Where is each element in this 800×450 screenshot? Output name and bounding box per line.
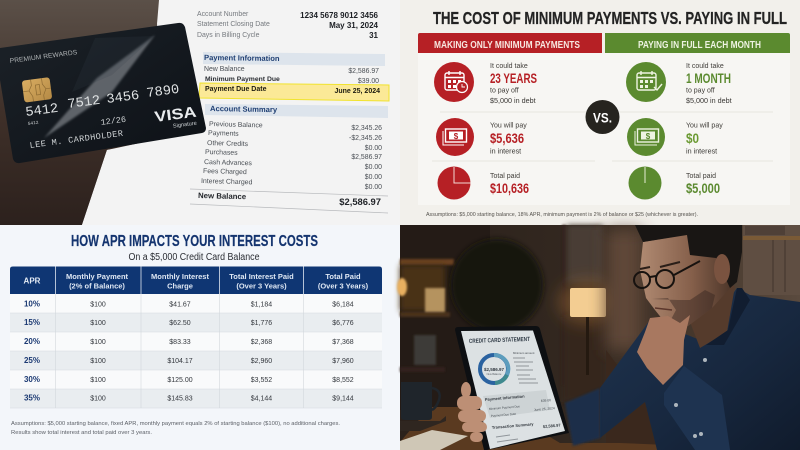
table title: HOW APR IMPACTS YOUR INTEREST COSTS (71, 233, 318, 250)
highlighted payment due date: June 25, 2024 (334, 88, 380, 95)
account summary section: $0.00 (365, 145, 382, 152)
tablet heading: CREDIT CARD STATEMENT (469, 337, 530, 345)
data table (10, 266, 382, 408)
row 30 percent: $3,552 (251, 377, 272, 384)
text: 23 years: $5,000 in debt (490, 96, 536, 105)
row 10 percent (24, 300, 354, 308)
row dividers (432, 112, 773, 161)
row 20 percent: $2,368 (251, 339, 272, 346)
man's far forearm sleeve (565, 388, 600, 446)
icon: red cash (436, 118, 474, 156)
text: total 10636 (490, 173, 529, 196)
text: 23 years: 23 YEARS (490, 70, 537, 86)
text: 1 month: It could take (686, 63, 724, 70)
text: interest 0: $0 (686, 130, 699, 146)
statement paper (82, 0, 400, 225)
row 30 percent: $100 (90, 377, 106, 384)
row 30 percent: $125.00 (167, 377, 193, 384)
text: interest 5636: in interest (490, 146, 521, 156)
panel: cost of minimum payments comparison (400, 0, 800, 225)
row 15 percent: 15% (24, 318, 40, 327)
table assumptions footnote: Assumptions: $5,000 starting balance, fixed APR, monthly payment equals 2% of starting balance ($100), no additional charges. (11, 421, 340, 427)
icon: green calendar (626, 62, 666, 102)
eyebrows (640, 262, 680, 269)
vs badge (586, 100, 620, 134)
account summary section: Previous Balance (209, 121, 263, 129)
account summary section (201, 104, 388, 191)
text: total 10636: Total paid (490, 173, 520, 180)
text: 1 month: $5,000 in debt (686, 96, 732, 105)
row 25 percent: $2,960 (251, 358, 272, 365)
panel: man reviewing tablet statement photo (397, 225, 800, 450)
row 15 percent: $6,776 (332, 320, 354, 327)
red column header (418, 33, 602, 53)
row 30 percent: 30% (24, 375, 40, 384)
text: 1 month: to pay off (686, 88, 715, 94)
account summary section: $0.00 (365, 184, 382, 191)
account summary section: $2,345.26 (351, 125, 382, 132)
panel: APR interest cost table (0, 225, 400, 450)
icon: green full circle total (628, 166, 662, 200)
payment information section: Minimum Payment Due (205, 76, 280, 83)
table body (10, 294, 382, 408)
card brand label: PREMIUM REWARDS (9, 49, 78, 65)
tablet payment information: Minimum Payment Due (489, 404, 520, 411)
text: 23 years: to pay off (490, 88, 519, 94)
card holder details: 5412 (27, 120, 39, 127)
ear (714, 254, 730, 284)
text: interest 5636 (490, 122, 527, 156)
row 10 percent: $6,184 (332, 302, 354, 308)
card number: 5412 (25, 102, 59, 121)
man's hand (637, 315, 690, 385)
account summary section: Interest Charged (201, 178, 253, 186)
row 20 percent: $7,368 (332, 339, 354, 346)
row 35 percent (24, 394, 354, 402)
table header: (Over 3 Years) (236, 282, 287, 290)
row 30 percent: $8,552 (332, 377, 354, 384)
table assumptions footnote (11, 421, 340, 436)
row 30 percent (24, 375, 354, 384)
man's head (634, 225, 742, 326)
table header: (2% of Balance) (69, 282, 125, 290)
icon: red pie total (438, 166, 470, 200)
icon: green cash: $ (646, 132, 651, 141)
account summary section: $2,586.97 (351, 154, 382, 161)
row 35 percent: $145.83 (167, 396, 193, 402)
table header: Charge (167, 282, 193, 290)
row 35 percent: $9,144 (332, 396, 354, 402)
account summary section: Payments (208, 130, 239, 138)
table header: (Over 3 Years) (318, 282, 369, 290)
statement header details: Statement Closing Date (197, 21, 270, 28)
red column header: MAKING ONLY MINIMUM PAYMENTS (434, 39, 580, 51)
text: total 5000: Total paid (686, 173, 716, 180)
shirt collar (706, 288, 750, 345)
text: interest 0: in interest (686, 146, 717, 156)
row 10 percent: $100 (90, 302, 106, 308)
visa logo: Signature (173, 121, 197, 130)
cuff buttons (674, 358, 707, 438)
man's shirt (600, 288, 800, 450)
account summary section: $0.00 (365, 174, 382, 181)
table header: Total Paid (325, 272, 361, 281)
row 25 percent: $104.17 (167, 358, 193, 365)
card holder details: 12/26 (100, 115, 127, 128)
row 25 percent: 25% (24, 356, 40, 365)
row 20 percent (24, 337, 354, 346)
man's near sleeve (664, 366, 730, 450)
row 10 percent: $41.67 (169, 302, 191, 308)
row 25 percent (24, 356, 354, 365)
row 20 percent: 20% (24, 337, 40, 346)
icon: green cash (627, 118, 665, 156)
card number (25, 83, 180, 121)
card holder details: LEE M. CARDHOLDER (29, 129, 124, 151)
new balance total: New Balance (198, 191, 247, 201)
text: 23 years (490, 63, 537, 105)
icon: red cash: $ (454, 132, 459, 141)
credit card (0, 23, 206, 163)
fingers holding tablet (457, 382, 487, 442)
table header: Monthly Payment (66, 272, 129, 281)
tablet (455, 326, 569, 450)
green column header: PAYING IN FULL EACH MONTH (638, 39, 761, 51)
visa logo: VISA (154, 104, 198, 126)
row 35 percent: $4,144 (251, 396, 272, 402)
comparison assumptions footnote: Assumptions: $5,000 starting balance, 18% APR, minimum payment is 2% of balance or $25 (whichever is greater). (426, 212, 698, 218)
row 25 percent: $7,960 (332, 358, 354, 365)
visa logo (154, 104, 198, 132)
tablet transaction summary (492, 421, 562, 442)
beard and mouth (652, 290, 715, 326)
row 35 percent: 35% (24, 394, 40, 402)
tablet list lines: Minimum amount (513, 351, 535, 355)
text: 1 month: 1 MONTH (686, 70, 731, 86)
row 15 percent: $100 (90, 320, 106, 327)
account summary section: Account Summary (210, 104, 278, 114)
green column header (605, 33, 790, 53)
card number: 3456 (106, 89, 140, 108)
glasses (634, 261, 700, 288)
card number: 7512 (67, 94, 101, 113)
desk (400, 407, 668, 450)
neck (690, 280, 735, 348)
statement header details: 1234 5678 9012 3456 (300, 11, 379, 20)
table header: Monthly Interest (151, 272, 209, 281)
lower background behind arm (606, 350, 660, 445)
content background (418, 53, 790, 205)
notebook (400, 430, 468, 450)
tablet payment information: $39.00 (541, 398, 551, 403)
card holder details (27, 115, 127, 151)
statement header details: May 31, 2024 (329, 21, 379, 30)
tablet payment information: June 25, 2024 (534, 406, 555, 412)
text: interest 5636: $5,636 (490, 130, 524, 146)
row 35 percent: $100 (90, 396, 106, 402)
text: interest 0 (686, 122, 723, 156)
tablet donut chart (480, 355, 508, 383)
row 20 percent: $83.33 (169, 339, 191, 346)
row 15 percent: $62.50 (169, 320, 191, 327)
payment information section (203, 52, 385, 85)
table header: APR (24, 276, 41, 286)
table subtitle: On a $5,000 Credit Card Balance (128, 252, 260, 263)
background shelves and lamp (397, 225, 800, 410)
panel: credit card and statement photo (0, 0, 400, 225)
wood table background (0, 0, 205, 225)
payment information section: Payment Information (204, 53, 280, 63)
tablet payment information: Payment Due Date (491, 412, 517, 418)
account summary section: Purchases (205, 149, 238, 157)
coffee mug (400, 382, 446, 431)
statement header details: Days in Billing Cycle (197, 32, 260, 39)
payment information section: $2,586.97 (348, 68, 379, 75)
vs badge: VS. (593, 110, 612, 126)
statement header details (197, 11, 379, 40)
account summary section: Other Credits (207, 140, 249, 148)
highlighted payment due date: Payment Due Date (205, 86, 267, 93)
text: total 5000 (686, 173, 720, 196)
text: total 10636: $10,636 (490, 180, 529, 196)
text: interest 0: You will pay (686, 122, 723, 130)
account summary section: Cash Advances (204, 159, 253, 167)
card chip (22, 77, 52, 103)
payment information section: $39.00 (358, 78, 379, 85)
row 10 percent: $1,184 (251, 302, 272, 308)
text: total 5000: $5,000 (686, 180, 720, 196)
tablet transaction summary: $2,586.97 (543, 422, 562, 429)
table header (10, 266, 382, 294)
hair (635, 225, 742, 288)
row 25 percent: $100 (90, 358, 106, 365)
card number: 7890 (146, 83, 180, 102)
row 20 percent: $100 (90, 339, 106, 346)
row 10 percent: 10% (24, 300, 40, 308)
text: 1 month (686, 63, 732, 105)
statement header details: 31 (369, 31, 379, 40)
row 15 percent (24, 318, 354, 327)
table header: Total Interest Paid (229, 272, 294, 281)
account summary section: $0.00 (365, 164, 382, 171)
icon: red calendar (434, 62, 474, 102)
text: 23 years: It could take (490, 63, 528, 70)
statement header details: Account Number (197, 11, 249, 18)
new balance total (190, 189, 388, 213)
tablet donut chart: New Balance (487, 373, 502, 376)
highlighted payment due date (199, 83, 389, 101)
table assumptions footnote: Results show total interest and total paid over 3 years. (11, 430, 152, 436)
new balance total: $2,586.97 (339, 196, 381, 207)
tablet payment information (483, 390, 555, 418)
account summary section: -$2,345.26 (349, 135, 382, 142)
tablet transaction summary: Transaction Summary (492, 421, 534, 430)
tablet donut chart: $2,586.97 (484, 367, 505, 372)
row 15 percent: $1,776 (251, 320, 272, 327)
payment information section: New Balance (204, 66, 245, 73)
account summary section: Fees Charged (203, 168, 247, 176)
text: interest 5636: You will pay (490, 122, 527, 130)
tablet payment information: Payment Information (485, 393, 525, 402)
